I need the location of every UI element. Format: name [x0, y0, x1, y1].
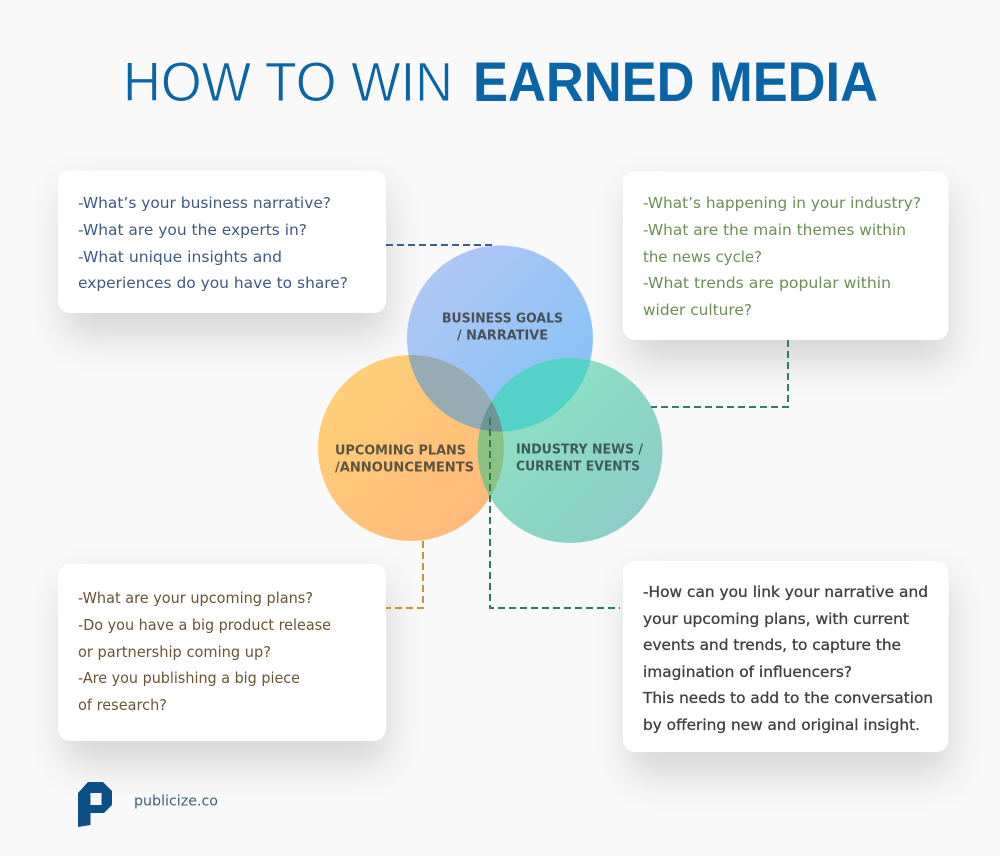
panel: upcoming plans questions: -Do you have a big product release: [78, 616, 331, 634]
panel: linking everything together: imagination of influencers?: [643, 663, 852, 681]
panel: linking everything together: This needs to add to the conversation: [642, 689, 933, 707]
panel: linking everything together: your upcoming plans, with current: [643, 610, 909, 628]
overlap: business and plans: [408, 355, 492, 430]
connector: business narrative: [386, 244, 495, 246]
connector: industry: [651, 340, 788, 407]
title: EARNED MEDIA: [473, 50, 878, 113]
label: upcoming plans: /ANNOUNCEMENTS: [335, 460, 474, 476]
panel: linking everything together: events and trends, to capture the: [643, 636, 901, 654]
title: HOW TO WIN: [123, 50, 453, 113]
panel: business narrative questions: experiences do you have to share?: [78, 274, 348, 292]
label: upcoming plans: UPCOMING PLANS: [335, 444, 466, 458]
panel: business narrative questions: -What’s your business narrative?: [78, 194, 331, 212]
label: business goals: [442, 312, 563, 344]
panel: upcoming plans questions: or partnership coming up?: [78, 643, 271, 661]
panel: industry questions: [623, 172, 953, 365]
panel: industry questions: wider culture?: [643, 301, 752, 319]
circle: upcoming plans: [318, 355, 504, 541]
label: industry news: INDUSTRY NEWS /: [516, 442, 643, 458]
venn diagram: [318, 246, 662, 543]
label: business goals: / NARRATIVE: [457, 328, 548, 344]
panel: industry questions: -What trends are popular within: [643, 274, 891, 292]
panel: business narrative questions: -What are you the experts in?: [78, 221, 307, 239]
circle: industry news: [478, 358, 662, 543]
panel: industry questions: the news cycle?: [643, 248, 762, 266]
panel: upcoming plans questions: [58, 564, 390, 766]
connector: overlap to linking panel: [490, 418, 620, 608]
panel: linking everything together: by offering new and original insight.: [643, 716, 920, 734]
label: industry news: CURRENT EVENTS: [516, 460, 640, 474]
panel: industry questions: -What’s happening in your industry?: [643, 194, 921, 212]
panel: business narrative questions: [58, 170, 390, 338]
circle: business goals: [407, 246, 593, 432]
panel: linking everything together: -How can you link your narrative and: [643, 583, 928, 601]
title: [123, 50, 878, 113]
panel: upcoming plans questions: -What are your upcoming plans?: [78, 589, 313, 607]
panel: industry questions: -What are the main themes within: [643, 221, 906, 239]
label: business goals: BUSINESS GOALS: [442, 312, 563, 326]
panel: business narrative questions: -What unique insights and: [78, 248, 282, 266]
connector: upcoming plans: [386, 541, 423, 608]
overlap: plans and industry: [478, 402, 504, 496]
label: upcoming plans: [335, 444, 474, 476]
overlap: business and industry: [482, 358, 590, 432]
icon: P mark: [78, 782, 112, 827]
logo: publicize: [78, 782, 218, 827]
overlap: all three: [480, 402, 502, 432]
panel: upcoming plans questions: -Are you publishing a big piece: [78, 669, 300, 687]
label: industry news: [516, 442, 643, 474]
wordmark: publicize.co: [134, 794, 218, 810]
panel: linking everything together: [623, 561, 953, 777]
panel: upcoming plans questions: of research?: [78, 696, 167, 714]
